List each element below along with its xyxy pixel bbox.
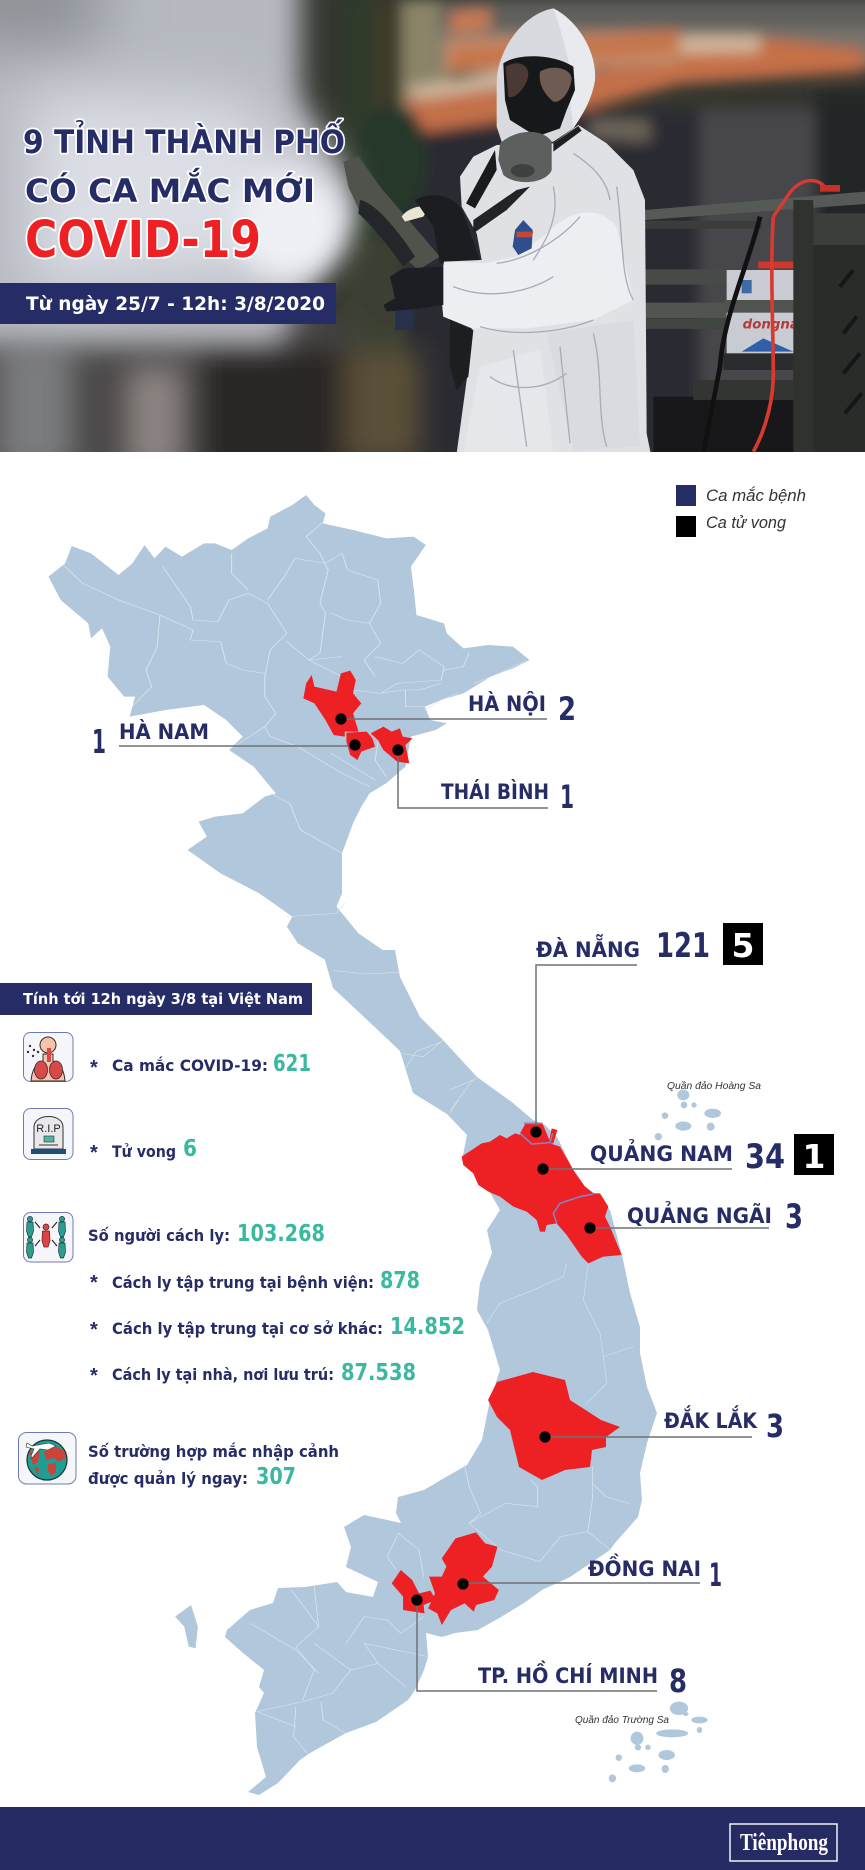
title: 9 TỈNH THÀNH PHỐ (23, 118, 345, 161)
callout: Ha Noi: 2 (558, 690, 576, 728)
equipment: rails, cables, battery, case (640, 181, 865, 453)
panel heading: Tính tới 12h ngày 3/8 tại Việt Nam (23, 990, 303, 1008)
icon: lungs and respiratory infection (24, 1032, 73, 1082)
callout: Thai Binh: THÁI BÌNH (441, 779, 549, 804)
legend (676, 485, 806, 537)
callout: Thai Binh: 1 (560, 778, 574, 816)
panel heading (0, 983, 312, 1015)
stat: hospital quarantine: * (90, 1272, 98, 1294)
icon: globe and airplane (18, 1432, 76, 1484)
icon: R.I.P gravestone (24, 1108, 73, 1160)
legend: Ca tử vong (706, 513, 787, 532)
callout: Dong Nai: 1 (709, 1556, 722, 1594)
stat: hospital quarantine: Cách ly tập trung tại bệnh viện: (112, 1273, 374, 1292)
callout: Ha Nam: 1 (92, 722, 106, 761)
label: Quan dao Truong Sa: Quần đảo Trường Sa (575, 1714, 669, 1726)
highlighted province: Dak Lak (488, 1372, 620, 1480)
callout: Ha Nam (92, 719, 361, 761)
stat: home quarantine: Cách ly tại nhà, nơi lưu trú: (112, 1365, 334, 1384)
callout: Da Nang: 5 (732, 926, 754, 965)
callout: Ha Noi: HÀ NỘI (468, 690, 546, 716)
stat: home quarantine: 87.538 (341, 1360, 416, 1386)
callout: Quang Nam: 1 (803, 1137, 825, 1176)
stat: other facility quarantine (90, 1314, 465, 1341)
icon: R.I.P gravestone: R.I.P (36, 1123, 61, 1135)
stat: imported cases: Số trường hợp mắc nhập cảnh (88, 1442, 339, 1461)
legend: Ca mắc bệnh (706, 486, 806, 505)
stat: imported cases (88, 1442, 339, 1490)
stat: imported cases: 307 (256, 1464, 296, 1490)
title: COVID-19 (25, 211, 261, 270)
sprayer nozzle, gloves and suit (343, 8, 651, 453)
callout: Da Nang (530, 923, 763, 1138)
callout: Dak Lak: 3 (766, 1407, 784, 1445)
stat: COVID-19 cases: Ca mắc COVID-19: (112, 1056, 268, 1075)
callout: Quang Ngai: QUẢNG NGÃI (627, 1201, 772, 1228)
title: CÓ CA MẮC MỚI (25, 168, 315, 210)
callout: Da Nang: ĐÀ NẴNG (536, 934, 640, 962)
date range banner: Từ ngày 25/7 - 12h: 3/8/2020 (26, 293, 325, 315)
footer bar with logo: Tiênphong (740, 1830, 828, 1856)
callout: Ho Chi Minh City: 8 (669, 1662, 687, 1700)
islands: Truong Sa (609, 1702, 708, 1782)
callout: Quang Nam: QUẢNG NAM (590, 1139, 733, 1166)
callout: Ho Chi Minh City (411, 1594, 687, 1700)
stat: home quarantine: * (90, 1365, 98, 1387)
stat: quarantined people: Số người cách ly: (88, 1226, 230, 1245)
stat: hospital quarantine: 878 (380, 1268, 420, 1294)
callout: Ho Chi Minh City: TP. HỒ CHÍ MINH (478, 1660, 658, 1688)
stat: COVID-19 cases: 621 (273, 1051, 311, 1077)
footer bar with logo (0, 1807, 865, 1870)
map of Vietnam (49, 495, 721, 1795)
islands: Hoang Sa (655, 1090, 721, 1140)
callout: Quang Nam: 34 (745, 1137, 785, 1177)
callout: Dong Nai: ĐỒNG NAI (588, 1553, 701, 1581)
stat: hospital quarantine (90, 1268, 420, 1294)
map: northern region (49, 495, 530, 960)
callout: Quang Ngai (584, 1197, 803, 1237)
date range banner (0, 283, 336, 324)
stat: other facility quarantine: Cách ly tập trung tại cơ sở khác: (112, 1319, 383, 1338)
highlighted provinces: Dong Nai, Ho Chi Minh City (392, 1532, 499, 1625)
panel: national statistics (0, 983, 465, 1490)
highlighted provinces: Ha Noi, Ha Nam, Thai Binh (303, 671, 413, 763)
icon: people spreading from a case (24, 1212, 73, 1262)
callout: Dong Nai (457, 1553, 722, 1594)
stat: quarantined people: 103.268 (237, 1221, 325, 1247)
stat: other facility quarantine: * (90, 1319, 98, 1341)
callout: Ha Nam: HÀ NAM (119, 719, 209, 744)
stat: home quarantine (90, 1360, 416, 1387)
map: Phu Quoc island (175, 1605, 198, 1648)
stat: deaths: * (90, 1142, 98, 1164)
callout: Ha Noi (335, 690, 576, 728)
callout: Quang Ngai: 3 (785, 1197, 803, 1237)
title (23, 118, 345, 270)
label: Quan dao Hoang Sa: Quần đảo Hoàng Sa (667, 1080, 761, 1092)
callout: Da Nang: 121 (656, 926, 710, 966)
disinfectant smoke cloud (0, 0, 357, 345)
callout: Dak Lak (539, 1405, 784, 1445)
stat: deaths: 6 (183, 1136, 197, 1162)
background: blurred street at lower left (0, 316, 433, 452)
stat: other facility quarantine: 14.852 (390, 1314, 465, 1340)
stat: imported cases: được quản lý ngay: (88, 1469, 248, 1488)
equipment: rails, cables, battery, case: dongnai (743, 317, 804, 332)
callout: Dak Lak: ĐẮK LẮK (664, 1405, 758, 1433)
callout: Quang Nam (537, 1134, 834, 1177)
stat: quarantined people (88, 1221, 325, 1247)
hero photo: worker in protective suit spraying disinfectant (0, 0, 865, 490)
stat: COVID-19 cases: * (90, 1057, 98, 1079)
map: central and southern regions (225, 950, 657, 1795)
stat: COVID-19 cases (90, 1051, 311, 1079)
background: street and building (345, 0, 865, 460)
callout: Thai Binh (392, 744, 574, 816)
stat: deaths: Tử vong (112, 1142, 176, 1161)
stat: deaths (90, 1136, 197, 1164)
highlighted provinces: Da Nang, Quang Nam, Quang Ngai (462, 1123, 622, 1263)
